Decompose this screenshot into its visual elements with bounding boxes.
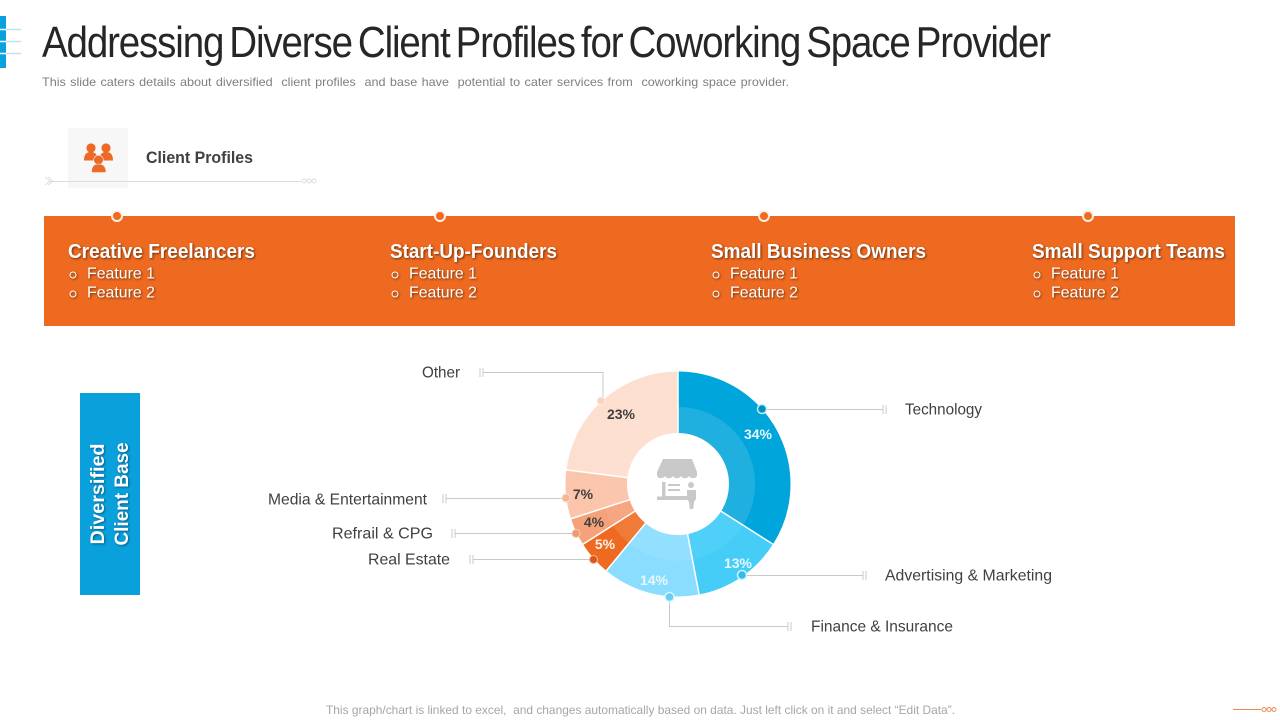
legend: other: Other	[422, 364, 461, 382]
column: small support teams: Small Support Teams	[1032, 241, 1225, 263]
legend: real estate: Real Estate	[368, 552, 450, 568]
percentage labels: 14%	[640, 572, 669, 588]
outer ring segments	[596, 402, 760, 566]
subtitle: This slide caters details about diversified client profiles and base have potential to cater services from coworking space provider.	[42, 75, 789, 89]
title: Addressing Diverse Client Profiles for Coworking Space Provider	[42, 18, 1051, 67]
column: small support teams	[1032, 241, 1225, 302]
legend: technology	[758, 402, 982, 418]
donut chart	[566, 371, 773, 595]
legend: real estate	[368, 552, 598, 568]
legend: media and entertainment: Media & Entertainment	[268, 492, 428, 508]
percentage labels	[573, 406, 773, 588]
column: creative freelancers: Creative Freelancers	[68, 241, 255, 263]
panel: client profile types	[44, 211, 1235, 326]
icon: client group	[68, 128, 128, 188]
column: small support teams: Feature 1	[1051, 266, 1119, 282]
legend: media and entertainment	[268, 492, 570, 508]
column: small business owners: Small Business Owners	[711, 241, 926, 263]
page marker	[1233, 708, 1276, 712]
column: start-up founders: Start-Up-Founders	[390, 241, 557, 263]
markers on panel top edge	[112, 211, 1093, 221]
column: start-up founders	[390, 241, 557, 302]
percentage labels: 4%	[584, 514, 605, 530]
section header: client profiles	[45, 128, 316, 188]
legend: finance and insurance	[665, 592, 953, 636]
legend: refrail and cpg: Refrail & CPG	[332, 526, 433, 542]
icon: storefront with person	[657, 459, 697, 509]
panel: diversified client base	[80, 393, 140, 595]
percentage labels: 23%	[607, 406, 636, 422]
percentage labels: 7%	[573, 486, 594, 502]
underline with end markers	[45, 177, 316, 185]
legend: technology: Technology	[905, 402, 982, 418]
column: creative freelancers: Feature 2	[87, 284, 155, 302]
column: small support teams: Feature 2	[1051, 284, 1119, 302]
column: start-up founders: Feature 1	[409, 266, 477, 282]
column: small business owners: Feature 1	[730, 266, 798, 282]
column: creative freelancers	[68, 241, 255, 302]
panel: diversified client base: Diversified	[88, 444, 109, 544]
legend: other	[422, 364, 605, 405]
column: small business owners: Feature 2	[730, 284, 798, 302]
footnote: This graph/chart is linked to excel, and changes automatically based on data. Just left click on it and select “Edit Data”.	[326, 703, 955, 717]
legend: finance and insurance: Finance & Insurance	[811, 618, 953, 636]
percentage labels: 5%	[595, 536, 616, 552]
heading: client profiles: Client Profiles	[146, 148, 253, 167]
legend: advertising and marketing	[738, 568, 1052, 584]
column: small business owners	[711, 241, 926, 302]
legend: advertising and marketing: Advertising & Marketing	[885, 568, 1052, 584]
percentage labels: 34%	[744, 426, 773, 442]
icon: top-left decorative tab	[0, 16, 21, 68]
legend: refrail and cpg	[332, 526, 580, 542]
percentage labels: 13%	[724, 555, 753, 571]
column: creative freelancers: Feature 1	[87, 266, 155, 282]
panel: diversified client base: Client Base	[112, 442, 133, 546]
inner ring shading	[614, 420, 742, 548]
column: start-up founders: Feature 2	[409, 284, 477, 302]
